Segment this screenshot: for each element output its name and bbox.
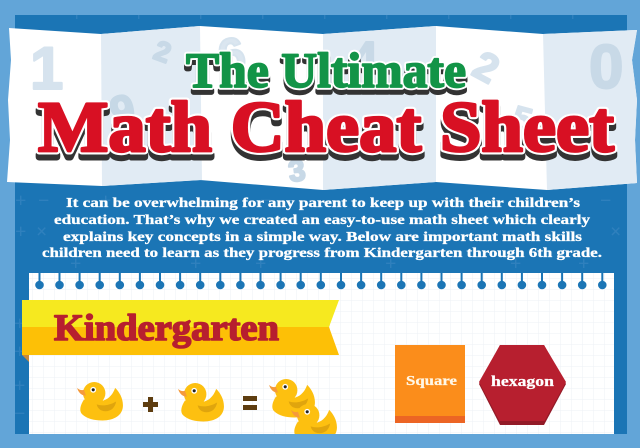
title line: The Ultimate: The Ultimate — [186, 42, 466, 98]
panel: notebook paper — [29, 273, 614, 434]
shape: square — [395, 345, 465, 423]
title line: Math Cheat Sheet: Math Cheat Sheet — [38, 87, 614, 167]
icon: duck 3 — [269, 379, 315, 418]
title — [38, 42, 614, 173]
math symbol pattern: − — [600, 190, 611, 212]
background numerals: 0 — [589, 33, 623, 102]
math symbol pattern: + — [133, 4, 144, 26]
math symbol pattern: − — [38, 190, 49, 212]
icon: plus sign — [143, 397, 158, 412]
math symbol pattern: × — [610, 221, 621, 243]
math symbol pattern: + — [505, 4, 516, 26]
intro text block: children need to learn as they progress from Kindergarten through 6th grade. — [42, 246, 602, 261]
math symbol pattern: + — [15, 221, 26, 243]
math symbol pattern: + — [71, 4, 82, 26]
duck addition equation — [77, 379, 337, 434]
math symbol pattern: + — [100, 190, 111, 212]
math symbol pattern: × — [36, 221, 47, 243]
intro text block — [42, 196, 602, 261]
background numerals — [30, 27, 623, 189]
background numerals: 3 — [286, 154, 307, 189]
title line: Math Cheat Sheet: Math Cheat Sheet — [38, 93, 614, 173]
background numerals: 2 — [466, 43, 506, 92]
background numerals: 6 — [213, 27, 250, 85]
icon: duck 2 — [178, 383, 224, 422]
intro text block: education. That’s why we created an easy-to-use math sheet which clearly — [54, 213, 590, 228]
shape: hexagon: hexagon — [491, 374, 555, 390]
spiral holes — [35, 273, 607, 289]
math symbol pattern: + — [14, 375, 25, 397]
background numerals: 4 — [352, 32, 378, 84]
icon: equals sign — [243, 396, 257, 410]
title line: The Ultimate: The Ultimate — [186, 47, 466, 103]
shape: square: Square — [406, 374, 457, 389]
math symbol pattern: + — [14, 313, 25, 335]
math symbol pattern: + — [257, 4, 268, 26]
intro text block: explains key concepts in a simple way. Below are important math skills — [63, 230, 583, 245]
math symbol pattern: + — [70, 253, 81, 275]
background numerals: 5 — [508, 99, 536, 141]
background numerals: 2 — [150, 35, 175, 69]
math symbol pattern: + — [319, 4, 330, 26]
background numerals: 9 — [106, 85, 139, 138]
ribbon: Kindergarten heading — [22, 300, 339, 362]
title line: Math Cheat Sheet: Math Cheat Sheet — [38, 87, 614, 167]
math symbol pattern: + — [578, 253, 589, 275]
math symbol pattern: − — [14, 403, 25, 425]
math symbol pattern: + — [195, 4, 206, 26]
panel: folded paper title banner — [7, 26, 637, 190]
math symbol pattern: + — [15, 190, 26, 212]
intro text block: It can be overwhelming for any parent to keep up with their children’s — [66, 196, 581, 211]
background numerals: 1 — [30, 35, 63, 102]
math symbol pattern: + — [255, 253, 266, 275]
icon: duck 4 — [291, 404, 337, 434]
math symbol pattern: + — [443, 4, 454, 26]
icon: duck 1 — [77, 382, 123, 421]
math symbol pattern: + — [510, 253, 521, 275]
math symbol pattern: + — [14, 341, 25, 363]
math symbol pattern: + — [381, 4, 392, 26]
math symbol pattern: + — [567, 4, 578, 26]
math symbol pattern: − — [260, 190, 271, 212]
math symbol pattern: + — [190, 253, 201, 275]
ribbon: Kindergarten heading: Kindergarten — [54, 308, 279, 349]
title line: The Ultimate: The Ultimate — [186, 42, 466, 98]
shape: hexagon — [479, 345, 566, 425]
math symbol pattern: + — [385, 253, 396, 275]
